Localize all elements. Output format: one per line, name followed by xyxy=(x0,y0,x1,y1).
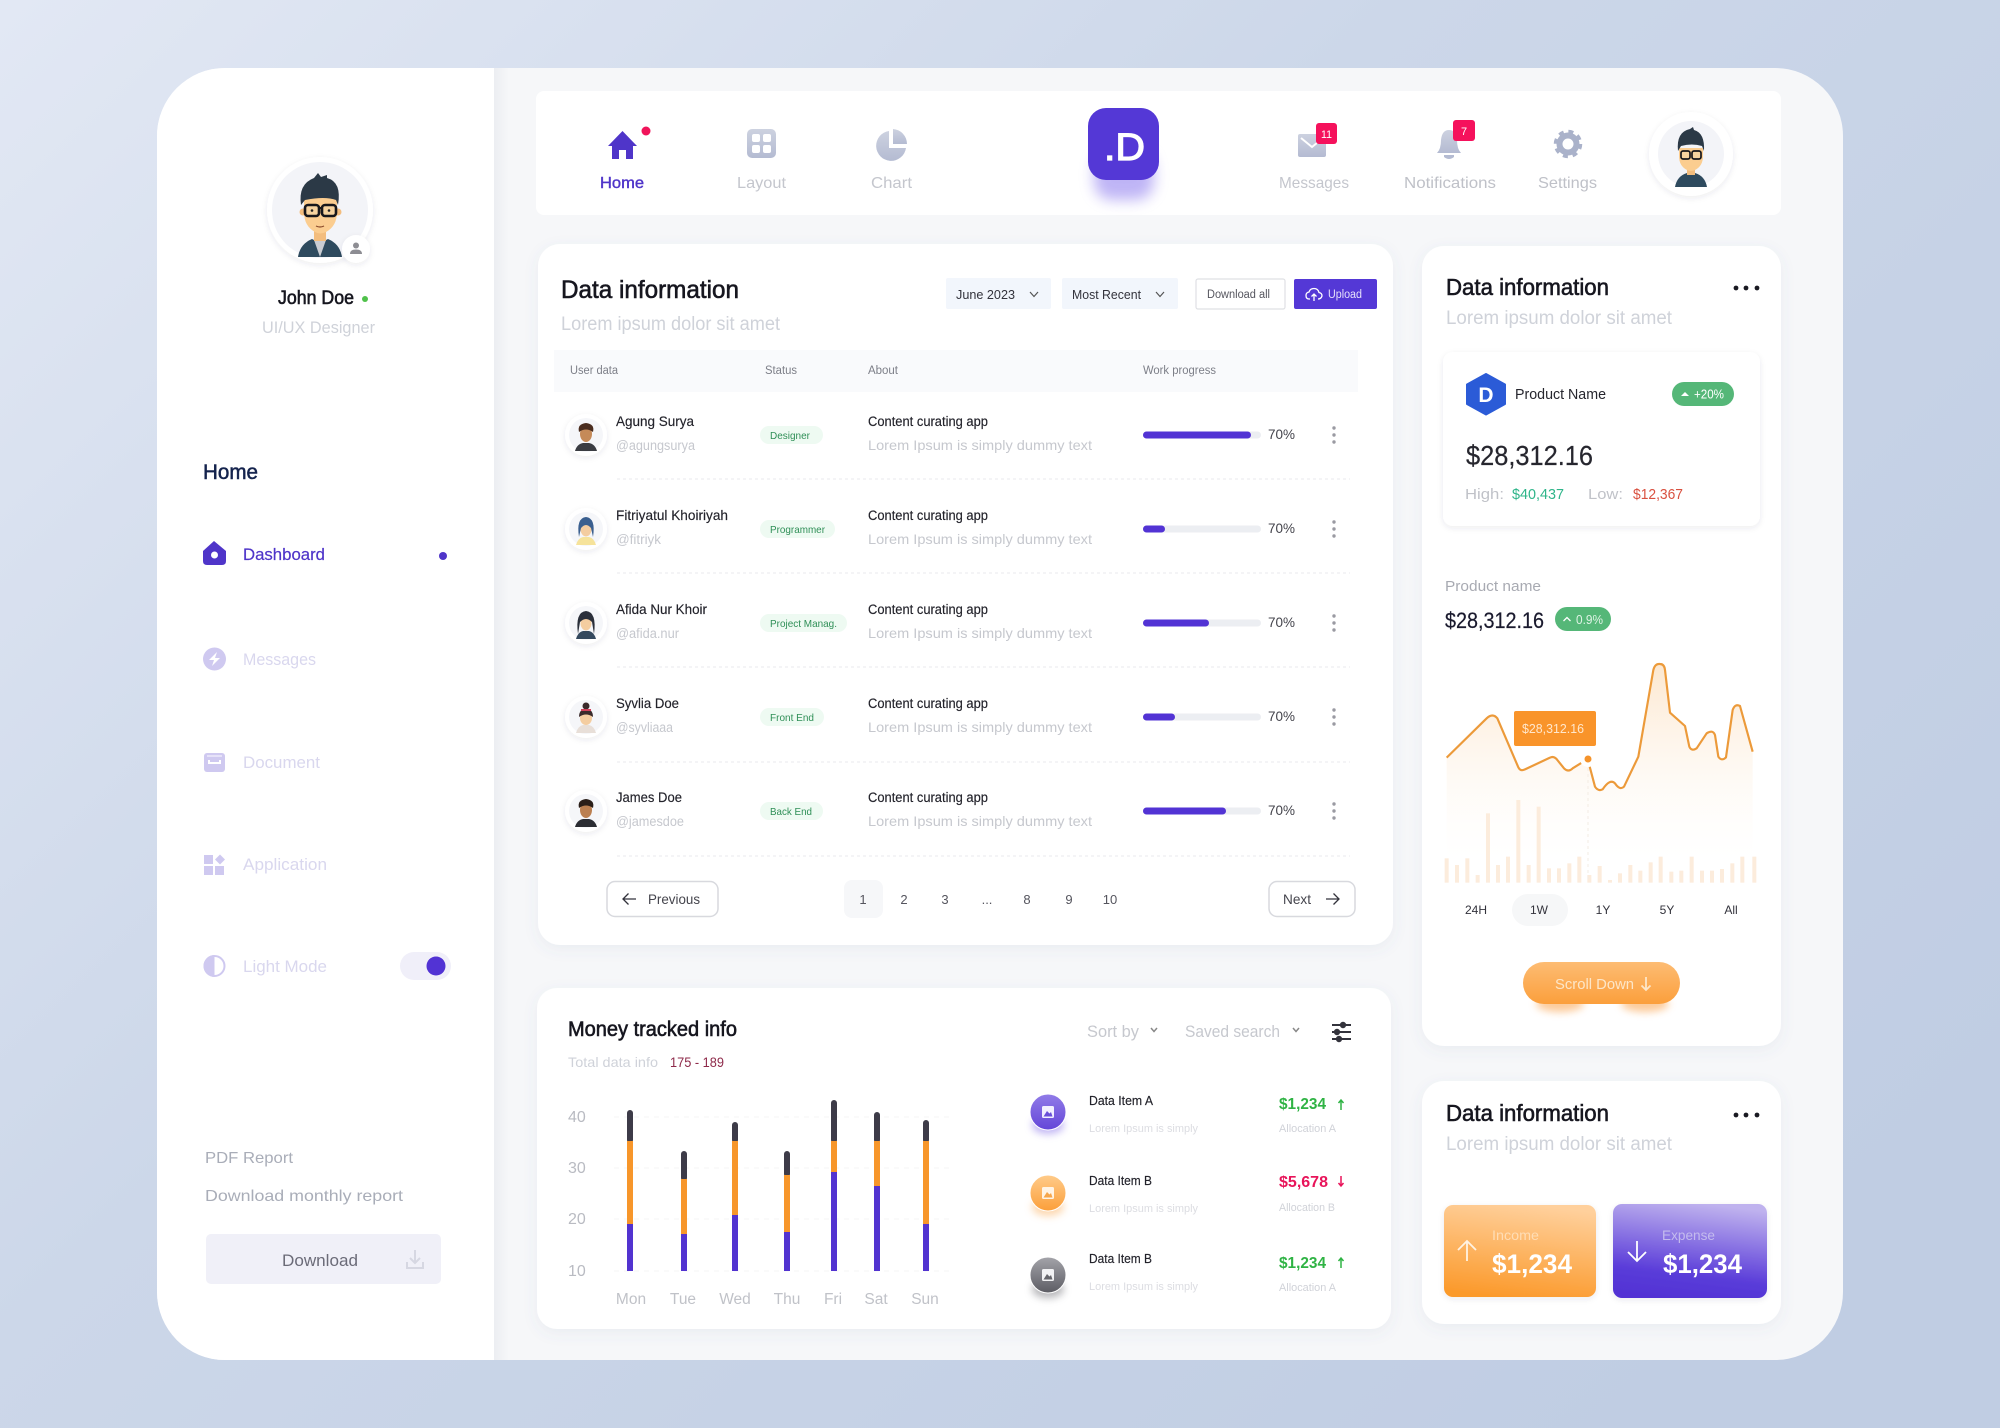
high low values: $12,367 xyxy=(1633,486,1683,503)
table header row: Work progress xyxy=(1143,365,1216,377)
table row: Fitriyatul Khoiriyah: Programmer xyxy=(770,524,825,536)
volume bars xyxy=(1445,800,1756,883)
nav: notifications: Notifications xyxy=(1404,175,1496,192)
panel heading: Data information xyxy=(1446,274,1609,300)
table row: Afida Nur Khoir: 70% xyxy=(1268,614,1295,630)
table row: Agung Surya: Lorem Ipsum is simply dummy text xyxy=(868,437,1092,453)
sidebar profile xyxy=(262,157,375,337)
table row: Agung Surya: Content curating app xyxy=(868,414,988,429)
nav: home: Home xyxy=(600,175,644,192)
product value: $28,312.16 xyxy=(1466,440,1593,471)
table row: Afida Nur Khoir: Project Manag. xyxy=(770,618,837,630)
table row: Agung Surya: Agung Surya xyxy=(616,413,694,429)
nav: chart: Chart xyxy=(871,175,913,192)
range selector: 24H xyxy=(1465,903,1487,917)
table row: Afida Nur Khoir xyxy=(565,601,1350,667)
button: upload xyxy=(1294,279,1377,309)
table row: Syvlia Doe: Front End xyxy=(770,712,814,724)
badge: +20% xyxy=(1672,382,1734,406)
high low values xyxy=(1465,486,1683,503)
page numbers: 3 xyxy=(941,892,949,907)
icon: more menu xyxy=(1734,1113,1759,1117)
dropdown: date xyxy=(946,278,1051,309)
table row: Fitriyatul Khoiriyah: Lorem Ipsum is simply dummy text xyxy=(868,531,1092,547)
nav item: light mode: Light Mode xyxy=(243,957,327,976)
button: next xyxy=(1269,882,1355,916)
table row: James Doe: Back End xyxy=(770,806,812,818)
button: download all: Download all xyxy=(1207,289,1270,301)
range selector xyxy=(1465,894,1738,926)
table row: Afida Nur Khoir: Lorem Ipsum is simply dummy text xyxy=(868,625,1092,641)
button: previous: Previous xyxy=(648,891,700,907)
table row: Afida Nur Khoir: @afida.nur xyxy=(616,626,679,641)
table row: James Doe: Content curating app xyxy=(868,790,988,805)
dropdown: saved search: Saved search xyxy=(1185,1022,1280,1041)
table row: Fitriyatul Khoiriyah: Content curating app xyxy=(868,508,988,523)
x axis labels: Mon xyxy=(616,1291,646,1308)
bar: Sun xyxy=(923,1120,929,1271)
card: expense xyxy=(1613,1204,1767,1298)
nav: notifications: 7 xyxy=(1461,126,1467,138)
page numbers: 9 xyxy=(1065,892,1073,907)
stacked bar chart xyxy=(568,1100,950,1308)
table header row: About xyxy=(868,365,899,377)
download button xyxy=(206,1234,441,1284)
product name: Product Name xyxy=(1515,387,1606,403)
dropdown: sort: Most Recent xyxy=(1072,287,1141,302)
nav item: messages: Messages xyxy=(243,650,316,669)
y axis labels: 10 xyxy=(568,1263,586,1280)
report description: Download monthly report xyxy=(205,1188,404,1205)
dropdown: date: June 2023 xyxy=(956,287,1015,302)
table header row: Status xyxy=(765,365,797,377)
table row: Syvlia Doe: @syvliaaa xyxy=(616,720,673,735)
logo button: .D xyxy=(1104,127,1145,169)
product chart heading: Product name xyxy=(1445,578,1541,595)
product chart heading: $28,312.16 xyxy=(1445,608,1544,633)
nav item: dashboard: Dashboard xyxy=(243,545,325,564)
page numbers: 2 xyxy=(900,892,908,907)
dashboard frame xyxy=(157,68,1843,1360)
table row: James Doe: Lorem Ipsum is simply dummy text xyxy=(868,813,1092,829)
list item: Data Item B grey: Data Item B xyxy=(1089,1252,1152,1266)
y axis labels: 30 xyxy=(568,1160,586,1177)
panel: product information xyxy=(1422,246,1781,1046)
total data label: Total data info xyxy=(568,1054,658,1070)
icon: product hexagon: D xyxy=(1478,384,1494,407)
panel subheading: Lorem ipsum dolor sit amet xyxy=(1446,308,1673,329)
list item: Data Item B orange: Data Item B xyxy=(1089,1174,1152,1188)
nav: layout xyxy=(737,129,787,192)
button: scroll down xyxy=(1523,962,1680,1012)
sidebar report block xyxy=(205,1150,441,1284)
bar: Thu xyxy=(784,1151,790,1271)
card: income xyxy=(1444,1205,1596,1297)
table header row xyxy=(554,350,1358,392)
tooltip: $28,312.16 xyxy=(1522,721,1584,736)
button: download all xyxy=(1196,279,1285,309)
x axis labels: Sat xyxy=(864,1291,888,1308)
table row: Agung Surya xyxy=(565,413,1350,479)
x axis labels xyxy=(616,1291,939,1308)
table row: Afida Nur Khoir: Content curating app xyxy=(868,602,988,617)
download button: Download xyxy=(282,1251,358,1270)
icon: user badge xyxy=(342,235,370,263)
logo button xyxy=(1088,108,1159,200)
report title: PDF Report xyxy=(205,1150,294,1167)
card: expense: $1,234 xyxy=(1663,1249,1742,1279)
page numbers: 1 xyxy=(859,892,867,907)
product chart heading: 0.9% xyxy=(1576,612,1603,627)
panel: income and expense xyxy=(1422,1081,1781,1324)
card: expense: Expense xyxy=(1662,1227,1715,1243)
avatar: John Doe xyxy=(267,157,373,263)
table row: Fitriyatul Khoiriyah: Fitriyatul Khoiriyah xyxy=(616,507,728,523)
list item: Data Item B grey: $1,234 xyxy=(1279,1255,1326,1272)
icon: more menu xyxy=(1734,286,1759,290)
list item: Data Item A xyxy=(1030,1094,1344,1135)
sidebar navigation xyxy=(203,461,451,980)
bar: Tue xyxy=(681,1151,687,1271)
list item: Data Item B orange: Allocation B xyxy=(1279,1202,1335,1214)
list item: Data Item A: Lorem Ipsum is simply xyxy=(1089,1123,1198,1135)
page numbers: 8 xyxy=(1023,892,1031,907)
table row: James Doe xyxy=(565,789,1350,856)
table row: Syvlia Doe xyxy=(565,695,1350,762)
nav: chart xyxy=(871,129,913,192)
list item: Data Item A: Data Item A xyxy=(1089,1094,1154,1108)
dropdown: sort by: Sort by xyxy=(1087,1022,1139,1041)
nav: notifications xyxy=(1404,120,1496,192)
table subheading: Lorem ipsum dolor sit amet xyxy=(561,314,781,335)
table row: Syvlia Doe: Content curating app xyxy=(868,696,988,711)
list item: Data Item B grey: Lorem Ipsum is simply xyxy=(1089,1281,1198,1293)
panel: money tracked info xyxy=(537,988,1391,1329)
table row: Agung Surya: Designer xyxy=(770,430,810,442)
list item: Data Item A: $1,234 xyxy=(1279,1096,1326,1113)
nav: settings: Settings xyxy=(1538,175,1597,192)
nav item: dashboard xyxy=(203,541,447,565)
list item: Data Item B grey: Allocation A xyxy=(1279,1282,1337,1294)
button: scroll down: Scroll Down xyxy=(1555,977,1634,993)
panel subheading: Lorem ipsum dolor sit amet xyxy=(1446,1134,1673,1155)
panel heading: Data information xyxy=(1446,1100,1609,1126)
table row: James Doe: James Doe xyxy=(616,789,682,805)
highlighted point xyxy=(1580,751,1596,767)
page numbers: ... xyxy=(982,892,992,907)
nav: messages xyxy=(1279,123,1349,192)
badge: +20%: +20% xyxy=(1694,388,1724,402)
nav: settings xyxy=(1538,132,1597,192)
x axis labels: Fri xyxy=(824,1291,842,1308)
list item: Data Item A: Allocation A xyxy=(1279,1123,1337,1135)
bar: Fri xyxy=(831,1100,837,1271)
table heading: Data information xyxy=(561,276,739,304)
icon: filter sliders xyxy=(1332,1023,1351,1041)
nav: home xyxy=(600,126,650,192)
pagination xyxy=(607,880,1355,918)
product summary card xyxy=(1443,352,1760,526)
button: next: Next xyxy=(1283,891,1311,907)
x axis labels: Wed xyxy=(719,1291,751,1308)
x axis labels: Sun xyxy=(911,1291,939,1308)
range selector: 1Y xyxy=(1596,903,1610,917)
nav heading: Home xyxy=(203,461,258,484)
nav item: light mode xyxy=(204,952,451,980)
card: income: $1,234 xyxy=(1492,1249,1572,1279)
nav: messages: 11 xyxy=(1321,129,1332,141)
table row: James Doe: 70% xyxy=(1268,802,1295,818)
bar: Sat xyxy=(874,1112,880,1271)
profile role: UI/UX Designer xyxy=(262,318,375,337)
nav: layout: Layout xyxy=(737,175,787,192)
page numbers: 10 xyxy=(1103,892,1117,907)
y axis labels xyxy=(568,1109,586,1280)
high low values: Low: xyxy=(1588,486,1623,503)
table row: Afida Nur Khoir: Afida Nur Khoir xyxy=(616,601,707,617)
table row: Syvlia Doe: Lorem Ipsum is simply dummy text xyxy=(868,719,1092,735)
area line chart xyxy=(1445,664,1756,883)
card: income: Income xyxy=(1492,1227,1539,1243)
table row: Agung Surya: 70% xyxy=(1268,426,1295,442)
profile name: John Doe xyxy=(278,288,354,309)
list item: Data Item B grey xyxy=(1030,1252,1344,1298)
nav item: messages xyxy=(203,648,316,670)
table row: Fitriyatul Khoiriyah: 70% xyxy=(1268,520,1295,536)
online status dot xyxy=(362,296,368,302)
high low values: $40,437 xyxy=(1512,486,1564,503)
list item: Data Item B orange: Lorem Ipsum is simply xyxy=(1089,1203,1198,1215)
bar: Mon xyxy=(627,1110,633,1271)
button: previous xyxy=(607,882,718,916)
user avatar xyxy=(1649,112,1733,196)
x axis labels: Tue xyxy=(670,1291,696,1308)
chart area fill xyxy=(1447,664,1753,860)
button: upload: Upload xyxy=(1328,289,1362,301)
panel heading: Money tracked info xyxy=(568,1018,737,1041)
y axis labels: 40 xyxy=(568,1109,586,1126)
nav item: application xyxy=(204,854,327,875)
range selector: 5Y xyxy=(1660,903,1674,917)
table row: Fitriyatul Khoiriyah: @fitriyk xyxy=(616,532,661,547)
y axis labels: 20 xyxy=(568,1211,586,1228)
list item: Data Item B orange: $5,678 xyxy=(1279,1174,1328,1191)
x axis labels: Thu xyxy=(774,1291,800,1308)
nav item: document: Document xyxy=(243,753,320,772)
table row: Syvlia Doe: 70% xyxy=(1268,708,1295,724)
page numbers xyxy=(844,880,1117,918)
nav: messages: Messages xyxy=(1279,175,1349,192)
range selector: All xyxy=(1724,903,1738,917)
table row: James Doe: @jamesdoe xyxy=(616,814,684,829)
panel: top navigation bar xyxy=(536,91,1781,215)
table row: Syvlia Doe: Syvlia Doe xyxy=(616,695,679,711)
tooltip xyxy=(1514,711,1596,746)
icon: product hexagon xyxy=(1467,374,1505,414)
chart line xyxy=(1447,664,1753,790)
table row: Fitriyatul Khoiriyah xyxy=(565,507,1350,573)
bar: Wed xyxy=(732,1122,738,1271)
total data label xyxy=(568,1054,724,1070)
nav item: application: Application xyxy=(243,855,327,874)
table row: Agung Surya: @agungsurya xyxy=(616,438,695,453)
table header row: User data xyxy=(570,365,619,377)
product chart heading xyxy=(1445,578,1611,633)
nav item: document xyxy=(204,753,320,772)
panel: data information table xyxy=(538,244,1393,945)
high low values: High: xyxy=(1465,486,1504,503)
list item: Data Item B orange xyxy=(1030,1174,1344,1216)
range selector: 1W xyxy=(1530,903,1549,917)
total data label: 175 - 189 xyxy=(670,1054,724,1070)
dropdown: sort xyxy=(1062,278,1178,309)
